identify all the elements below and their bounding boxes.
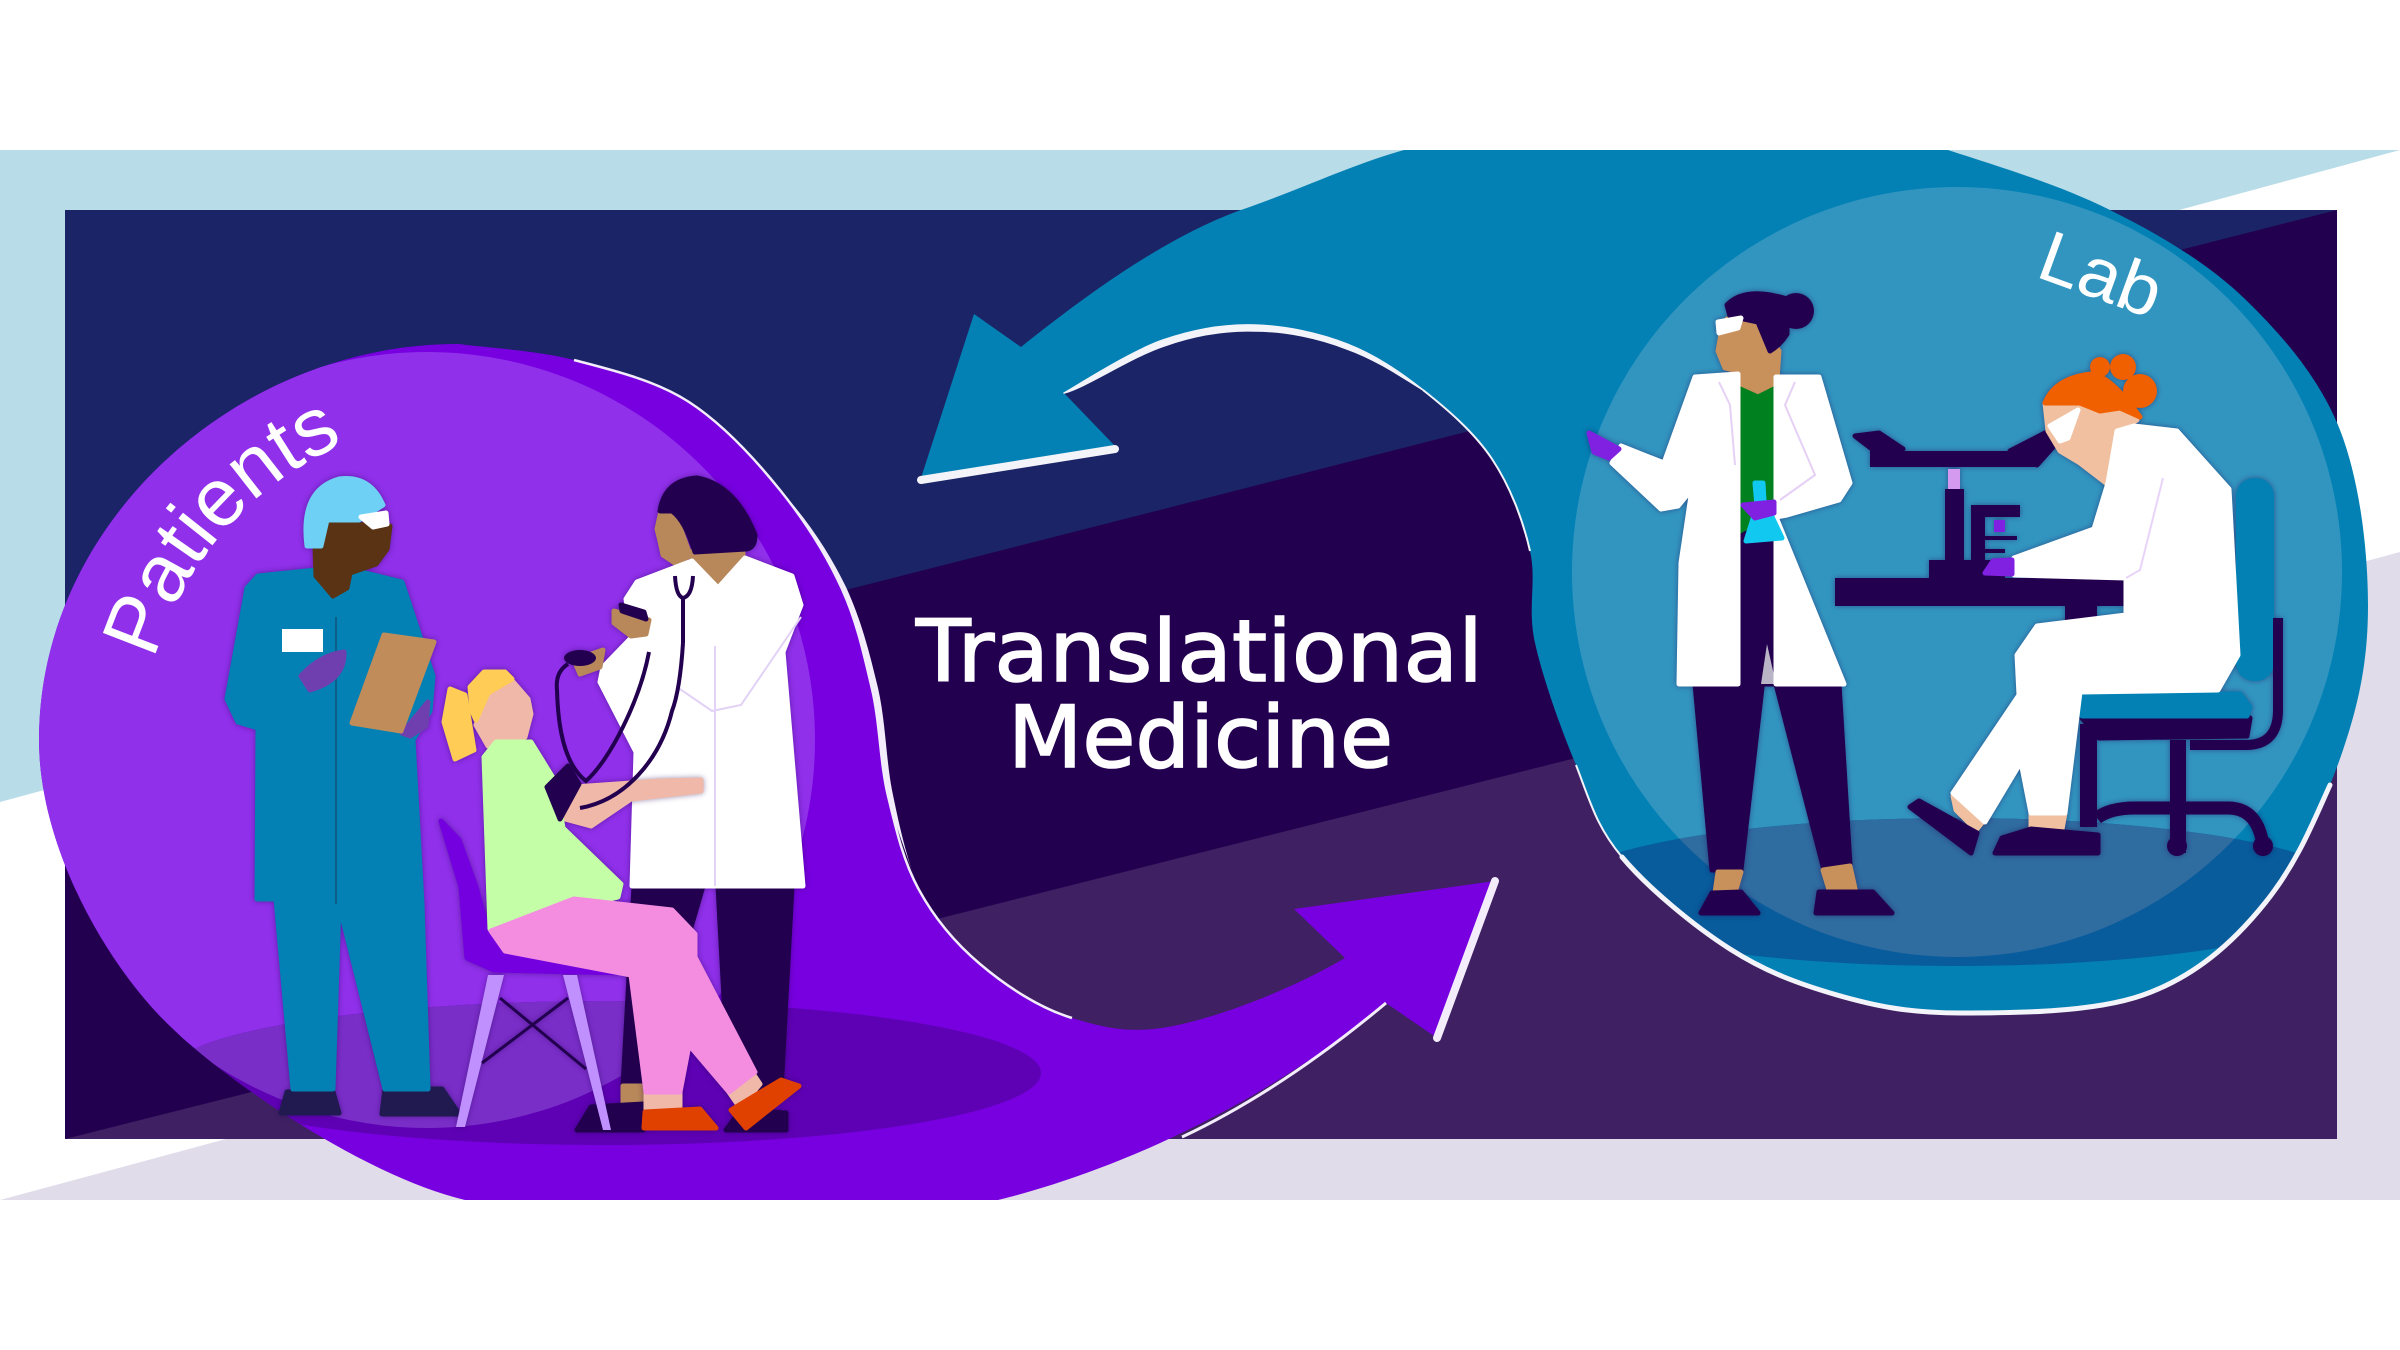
- panel: lab arrow blob: [921, 150, 2368, 1013]
- background frame: [0, 150, 2400, 1200]
- figure: nurse in teal scrubs: [227, 479, 459, 1114]
- icon: stethoscope: [557, 576, 693, 808]
- figure: microscope on bench: [1835, 433, 2126, 624]
- label: Patients: Patients: [103, 410, 338, 654]
- figure: standing scientist: [1589, 293, 1892, 913]
- figure: seated scientist on lab chair: [1910, 354, 2278, 856]
- label: Lab: Lab: [2029, 216, 2173, 334]
- figure: seated patient on chair: [441, 672, 799, 1130]
- figure: doctor in white coat: [564, 478, 803, 1130]
- title: Translational Medicine: Translational: [915, 602, 1483, 702]
- title: Translational Medicine: Medicine: [1008, 688, 1393, 788]
- infographic: translational medicine cycle: [0, 150, 2400, 1200]
- panel: patients arrow blob: [39, 344, 1495, 1200]
- title: Translational Medicine: [915, 602, 1483, 788]
